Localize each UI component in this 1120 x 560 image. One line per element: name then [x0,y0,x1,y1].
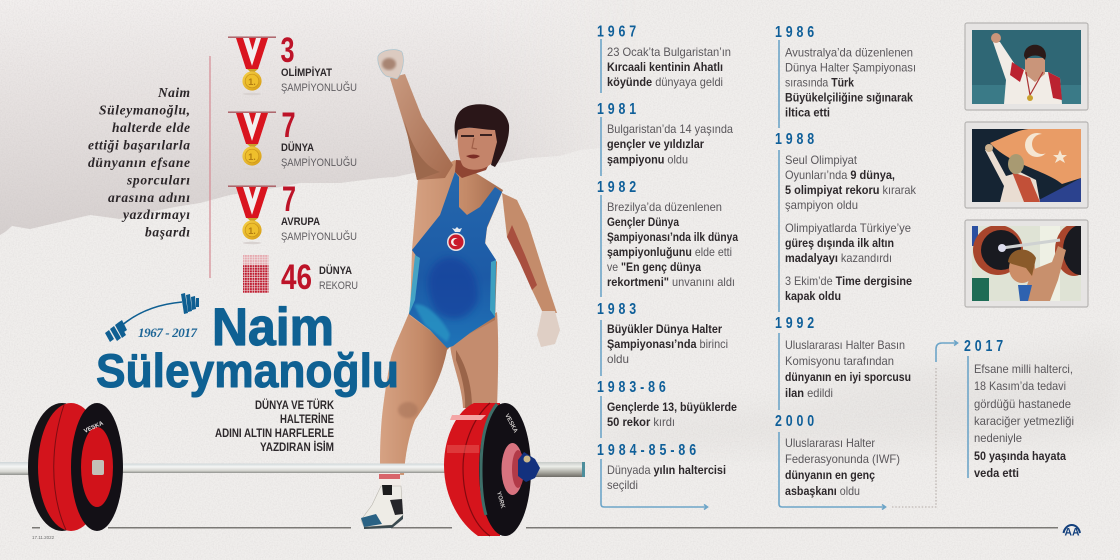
entry: 1983-86: 1983-86 [597,378,666,395]
icon: gold medal [228,186,276,244]
life years: 1967 - 2017 [138,325,198,340]
title: Naim [212,298,334,357]
entry: 2017: gördüğü hastanede [974,397,1071,411]
entry: 1983 [597,300,728,376]
baseline rule [32,527,1058,529]
right leg [450,312,498,408]
entry: 2017: veda etti [974,466,1019,480]
left weight plates: VESKA [83,420,105,435]
entry: 1986 [775,23,916,128]
athlete figure [361,50,560,529]
entry: 2000: dünyanın en genç [785,468,875,482]
subtitle: HALTERİNE [280,413,334,426]
intro italic text: sporcuları [126,172,190,188]
entry: 1982: Brezilya’da düzenlenen [607,200,722,214]
stat: 3 olympic championships: ŞAMPİYONLUĞU [281,81,357,94]
entry: 1983: Büyükler Dünya Halter [607,322,722,336]
entry: 2017: karaciğer yetmezliği [974,414,1074,428]
right weight plates [444,403,540,536]
arrow: to 2017 [936,340,958,362]
entry: 1983-86: Gençlerde 13, büyüklerde [607,400,737,414]
entry: 1981: Bulgaristan’da 14 yaşında [607,122,733,136]
intro italic text: Süleymanoğlu, [99,102,190,118]
entry: 2000: Federasyonunda (IWF) [785,452,900,466]
entry: 2000: asbaşkanı oldu [785,484,860,498]
torso [410,160,503,345]
head [455,104,509,170]
entry: 1986: iltica etti [785,106,830,120]
stat: 7 european championships: 7 [282,180,296,219]
subtitle: DÜNYA VE TÜRK [255,399,335,412]
photo: lifting barbell [965,220,1099,307]
entry: 1981: şampiyonu oldu [607,152,688,166]
stat: 7 world championships: ŞAMPİYONLUĞU [281,156,357,169]
icon: small curved barbell [105,293,199,342]
subtitle [215,399,335,454]
intro italic text: dünyanın efsane [88,155,190,170]
entry: 2017: 2017 [964,337,1003,354]
raised arm [390,74,453,180]
intro italic text: arasına adını [108,190,190,205]
entry: 1992: 1992 [775,314,814,331]
entry: 1992: dünyanın en iyi sporcusu [785,370,911,384]
entry: 1988: 5 olimpiyat rekoru kırarak [785,183,917,197]
entry: 1982: şampiyonluğunu elde etti [607,245,732,259]
entry: 1983: Şampiyonası’nda birinci [607,337,728,351]
entry: 1983: oldu [607,352,629,366]
photo: with Turkish flag [965,122,1088,208]
entry: 1988: Seul Olimpiyat [785,153,858,167]
singlet [409,172,502,348]
entry: 1967: köyünde dünyaya geldi [607,75,723,89]
stat: 7 world championships [228,106,357,170]
title: Süleymanoğlu [96,344,399,397]
entry: 1988: Olimpiyatlarda Türkiye’ye [785,221,911,235]
entry: 1988: madalyayı kazandırdı [785,251,892,265]
entry: 2017: Efsane milli halterci, [974,362,1073,376]
entry: 2000: 2000 [775,412,814,429]
entry: 2017: nedeniyle [974,431,1022,445]
stat: 7 world championships: 7 [282,106,296,145]
entry: 2017: 50 yaşında hayata [974,449,1066,463]
entry: 1967 [597,22,731,93]
photo: medal ceremony [965,23,1088,110]
entry: 1983: 1983 [597,300,636,317]
timeline: column 2 [775,23,917,510]
intro italic text: Naim [157,85,190,100]
entry: 1984-85-86: 1984-85-86 [597,441,696,458]
entry: 1988 [775,130,917,312]
entry: 1988: Oyunları’nda 9 dünya, [785,168,895,182]
entry: 1981 [597,100,733,176]
stat: 46 world records [243,255,358,297]
stat: 46 world records: DÜNYA [319,264,352,277]
entry: 1988: 1988 [775,130,814,147]
entry: 1967: 23 Ocak’ta Bulgaristan’ın [607,45,731,59]
entry: 1986: Dünya Halter Şampiyonası [785,60,916,74]
entry: 1988: 3 Ekim’de Time dergisine [785,274,912,288]
divider: red vertical line [209,56,211,278]
entry: 1992: ilan edildi [785,386,833,400]
icon: gold medal [228,37,276,95]
neck and chin shadow [455,160,490,178]
entry: 2017 [964,337,1074,480]
entry: 1986: Avustralya’da düzenlenen [785,46,913,60]
stat: 3 olympic championships: 3 [280,31,294,70]
lowered arm [502,193,557,313]
right weight plates: YORK [495,491,506,510]
entry: 1992 [775,314,911,410]
entry: 1984-85-86: Dünyada yılın haltercisi [607,463,726,477]
entry: 1981: 1981 [597,100,636,117]
icon: dot grid [243,255,268,293]
arrow: to column 2 [601,459,708,510]
entry: 2000: Uluslararası Halter [785,436,875,450]
stat: 3 olympic championships: OLİMPİYAT [281,66,332,79]
entry: 1986: 1986 [775,23,814,40]
entry: 1983-86: 50 rekor kırdı [607,415,675,429]
subtitle: ADINI ALTIN HARFLERLE [215,428,334,440]
icon: gold medal [228,112,276,170]
stat: 7 european championships: AVRUPA [281,216,320,228]
barbell [0,403,585,536]
intro italic text: ettiği başarılarla [88,138,190,152]
entry: 1984-85-86: seçildi [607,478,638,492]
intro italic text [88,85,190,240]
sock and shoe [361,473,403,529]
entry: 1986: Büyükelçiliğine sığınarak [785,90,913,104]
stat: 46 world records: 46 [281,258,312,297]
dotted connector [892,368,936,507]
entry: 2000 [775,412,900,498]
arrow: to dotted connector [779,432,886,510]
entry: 1982: ve "En genç dünya [607,260,701,274]
entry: 1982 [597,178,738,297]
emblem: Turkish crest [447,227,465,251]
right weight plates: VESKA [503,413,519,435]
date stamp: 17.11.2022 [32,535,55,540]
entry: 1988: kapak oldu [785,289,841,303]
entry: 1982: 1982 [597,178,636,195]
entry: 1984-85-86 [597,441,726,492]
entry: 2017: 18 Kasım’da tedavi [974,379,1066,393]
left leg [380,313,450,475]
entry: 1988: şampiyon oldu [785,198,858,212]
entry: 1986: sırasında Türk [785,76,854,90]
left weight plates [28,403,123,531]
entry: 1992: Uluslararası Halter Basın [785,338,905,352]
entry: 1983-86 [597,378,737,438]
timeline: column 1 [597,22,738,510]
entry: 1988: güreş dışında ilk altın [785,236,894,250]
entry: 1981: gençler ve yıldızlar [607,137,704,151]
entry: 1992: Komisyonu tarafından [785,354,894,368]
intro italic text: başardı [145,224,190,240]
entry: 1982: Gençler Dünya [607,215,679,229]
stat: 7 world championships: DÜNYA [281,141,314,154]
intro italic text: halterde elde [112,120,190,135]
intro italic text: yazdırmayı [121,207,190,222]
bar [0,462,585,477]
title [96,298,399,397]
entry: 1982: Şampiyonası’nda ilk dünya [607,230,738,244]
entry: 1967: Kırcaali kentinin Ahatlı [607,60,723,74]
fist [378,50,403,79]
stat: 3 olympic championships [228,31,357,95]
logo: AA: AA [1064,526,1080,538]
subtitle: YAZDIRAN İSİM [260,441,334,454]
entry: 1967: 1967 [597,22,636,40]
stat: 46 world records: REKORU [319,280,358,292]
stat: 7 european championships [228,180,357,244]
entry: 1982: rekortmeni" unvanını aldı [607,275,735,289]
stat: 7 european championships: ŞAMPİYONLUĞU [281,230,357,243]
